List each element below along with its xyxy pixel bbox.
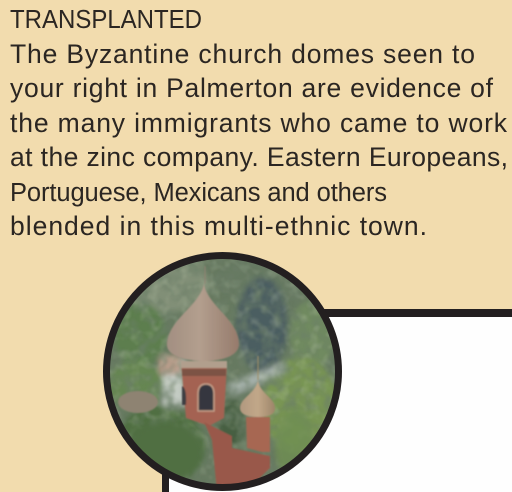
body text: at the zinc company. Eastern Europeans,: [10, 142, 508, 172]
photo: main tower and domes: [118, 266, 275, 492]
heading: TRANSPLANTED: [10, 6, 202, 34]
circular photo: church domes: [100, 250, 345, 492]
white panel with black border: [162, 309, 512, 492]
body text: the many immigrants who came to work: [10, 108, 508, 138]
body text: [10, 39, 508, 241]
body text: blended in this multi-ethnic town.: [10, 211, 427, 241]
body text: your right in Palmerton are evidence of: [10, 73, 494, 103]
photo: trees background: [110, 259, 335, 484]
photo: foreground foliage: [112, 279, 333, 484]
body text: Portuguese, Mexicans and others: [10, 179, 387, 207]
circle border: [106, 256, 338, 488]
body text: The Byzantine church domes seen to: [10, 39, 475, 69]
